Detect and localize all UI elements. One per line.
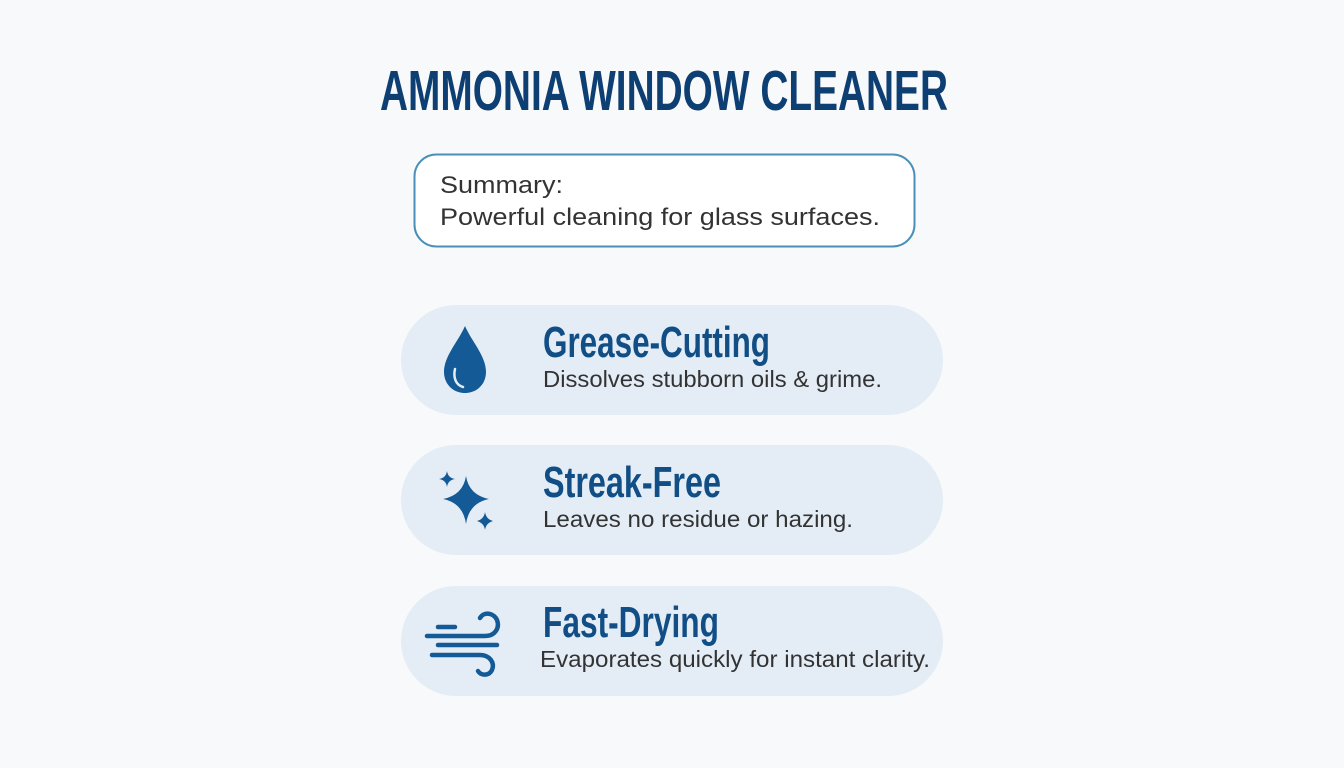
heading: Grease-Cutting (543, 318, 770, 367)
description: Evaporates quickly for instant clarity. (540, 646, 930, 672)
heading: Streak-Free (543, 458, 721, 507)
description: Dissolves stubborn oils & grime. (543, 366, 882, 392)
heading: Fast-Drying (543, 598, 719, 647)
description: Leaves no residue or hazing. (543, 506, 853, 532)
panel: grease-cutting (401, 305, 943, 415)
title: AMMONIA WINDOW CLEANER (380, 59, 948, 123)
panel: fast-drying (401, 586, 943, 696)
summary text: Powerful cleaning for glass surfaces. (440, 204, 880, 231)
icon: water drop (444, 326, 486, 393)
icon: sparkles (439, 471, 493, 530)
icon: wind (427, 614, 498, 675)
summary box (414, 154, 914, 246)
panel: streak-free (401, 445, 943, 555)
summary label: Summary: (440, 172, 563, 199)
